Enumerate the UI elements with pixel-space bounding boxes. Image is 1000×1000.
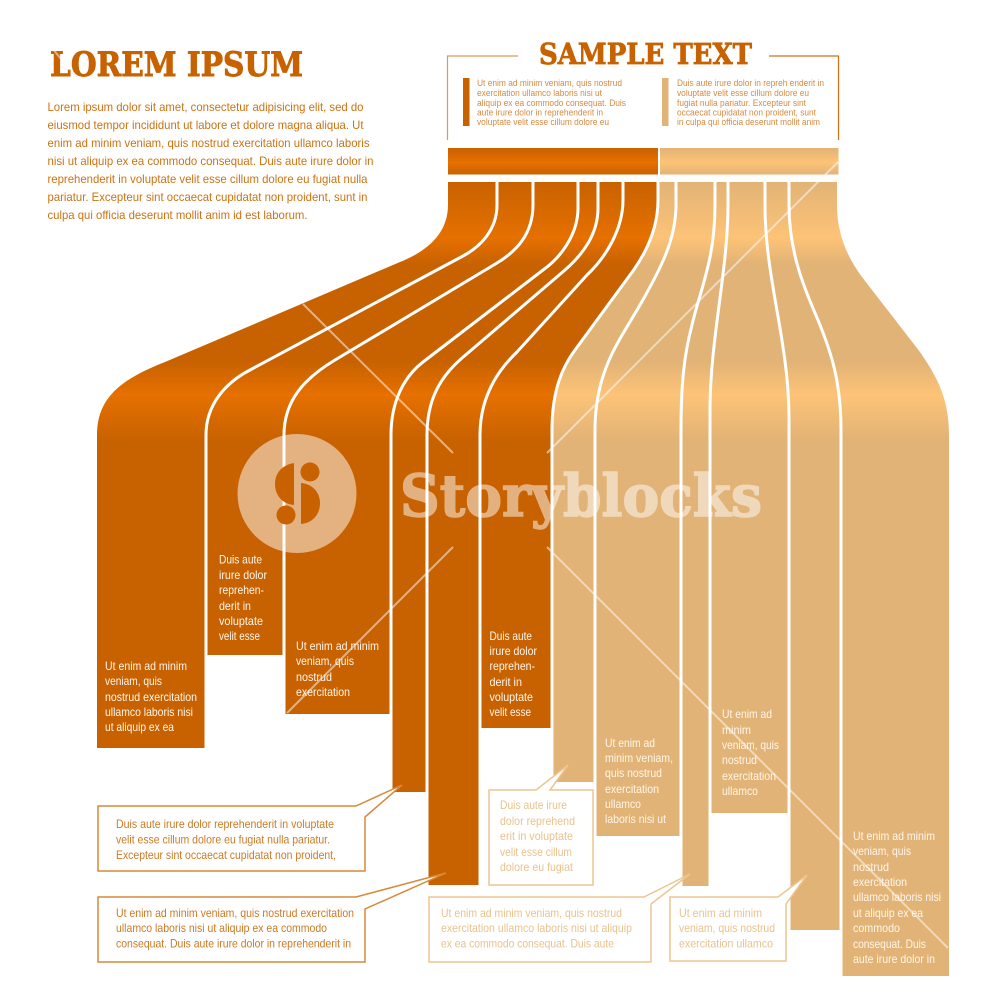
- ribbon label 2: derit in: [219, 600, 251, 613]
- watermark logo: [238, 434, 356, 553]
- intro paragraph: eiusmod tempor incididunt ut labore et dolore magna aliqua. Ut: [48, 118, 364, 132]
- ribbon label 6: voluptate: [490, 691, 533, 704]
- right column text: voluptate velit esse cillum dolore eu: [677, 88, 809, 98]
- left column marker: [463, 78, 470, 126]
- ribbon label 12: ullamco laboris nisi: [853, 891, 941, 904]
- intro paragraph: pariatur. Excepteur sint occaecat cupidatat non proident, sunt in: [48, 190, 368, 204]
- ribbon label 2: velit esse: [219, 630, 260, 643]
- ribbon label 1: veniam, quis: [105, 675, 162, 688]
- ribbon label 2: voluptate: [219, 615, 263, 628]
- ribbon label 12: ut aliquip ex ea: [853, 907, 923, 920]
- ribbon label 8: Ut enim ad: [605, 737, 655, 750]
- ribbon label 1: nostrud exercitation: [105, 691, 197, 704]
- ribbon label 6: derit in: [490, 676, 522, 689]
- ribbon label 12: commodo: [853, 922, 900, 935]
- intro paragraph: nisi ut aliquip ex ea commodo consequat. Duis aute irure dolor in: [48, 154, 374, 168]
- intro paragraph: Lorem ipsum dolor sit amet, consectetur adipisicing elit, sed do: [48, 100, 364, 114]
- ribbon label 10: Ut enim ad: [722, 708, 772, 721]
- left column text: aute irure dolor in reprehenderit in: [477, 108, 603, 118]
- ribbon label 6: Duis aute: [490, 630, 532, 643]
- header frame: [448, 56, 838, 140]
- ribbon label 12: consequat. Duis: [853, 938, 926, 951]
- callout: ribbon 7: dolore eu fugiat: [500, 861, 574, 874]
- ribbon label 12: Ut enim ad minim: [853, 830, 935, 843]
- right column text: Duis aute irure dolor in repreh enderit in: [677, 78, 824, 88]
- callout: ribbon 7: erit in voluptate: [500, 830, 573, 843]
- ribbon label 8: quis nostrud: [605, 767, 662, 780]
- ribbon label 6: velit esse: [490, 706, 531, 719]
- light segment: [660, 148, 838, 174]
- callout: ribbon 9: Ut enim ad minim veniam, quis nostrud: [441, 907, 622, 920]
- callout: ribbon 4: [98, 785, 402, 871]
- right column text: [677, 78, 824, 127]
- ribbon label 10: nostrud: [722, 754, 757, 767]
- left column text: aliquip ex ea commodo consequat. Duis: [477, 98, 626, 108]
- ribbon label 10: minim: [722, 724, 751, 737]
- ribbon label 3: exercitation: [296, 686, 350, 699]
- callout: ribbon 5: Ut enim ad minim veniam, quis nostrud exercitation: [116, 907, 354, 920]
- ribbon label 8: ullamco: [605, 798, 641, 811]
- ribbon label 1: ullamco laboris nisi: [105, 706, 193, 719]
- ribbon label 2: irure dolor: [219, 569, 267, 582]
- ribbon label 10: [722, 708, 779, 798]
- ribbon label 1: ut aliquip ex ea: [105, 721, 174, 734]
- ribbon label 3: nostrud: [296, 671, 332, 684]
- intro paragraph: culpa qui officia deserunt mollit anim id est laborum.: [48, 208, 308, 222]
- watermark wordmark: Storyblocks: [400, 462, 762, 531]
- flow chart: ribbons: [97, 180, 949, 978]
- ribbon label 8: laboris nisi ut: [605, 813, 667, 826]
- left column text: voluptate velit esse cillum dolore eu: [477, 117, 609, 127]
- callout: ribbon 11: veniam, quis nostrud: [679, 922, 775, 935]
- right column text: in culpa qui officia deserunt mollit anim: [677, 117, 820, 127]
- callout: ribbon 7: Duis aute irure: [500, 799, 567, 812]
- callout: ribbon 4: Excepteur sint occaecat cupidatat non proident,: [116, 849, 336, 862]
- callout: ribbon 9: ex ea commodo consequat. Duis aute: [441, 938, 614, 950]
- ribbon label 10: veniam, quis: [722, 739, 779, 752]
- light ribbons: [552, 182, 949, 976]
- ribbon separators: [206, 180, 841, 978]
- header title: SAMPLE TEXT: [539, 37, 752, 71]
- split bar: [448, 148, 838, 174]
- callout: ribbon 11: Ut enim ad minim: [679, 907, 762, 920]
- intro paragraph: [48, 100, 374, 222]
- ribbon label 6: [490, 630, 537, 719]
- ribbon label 1: [105, 660, 197, 734]
- left column text: [477, 78, 626, 127]
- ribbon label 2: Duis aute: [219, 554, 262, 566]
- intro paragraph: reprehenderit in voluptate velit esse cillum dolore eu fugiat nulla: [48, 172, 368, 186]
- callout: ribbon 9: [429, 874, 690, 962]
- ribbon label 12: nostrud: [853, 861, 889, 874]
- ribbon label 10: exercitation: [722, 770, 776, 783]
- dark ribbons: [97, 182, 658, 885]
- ribbon label 3: Ut enim ad minim: [296, 640, 379, 653]
- callout: ribbon 5: [98, 873, 446, 962]
- callout: ribbon 4: Duis aute irure dolor reprehenderit in voluptate: [116, 818, 334, 831]
- callout: ribbon 7: velit esse cillum: [500, 846, 572, 859]
- ribbon label 3: [296, 640, 379, 699]
- ribbon label 6: reprehen-: [490, 660, 535, 673]
- ribbon label 1: Ut enim ad minim: [105, 660, 187, 673]
- right column marker: [662, 78, 668, 126]
- callout: ribbon 11: [670, 875, 807, 961]
- ribbon label 6: irure dolor: [490, 645, 537, 658]
- intro paragraph: enim ad minim veniam, quis nostrud exercitation ullamco laboris: [48, 136, 370, 150]
- callout: ribbon 7: dolor reprehend: [500, 815, 575, 828]
- callout: ribbon 5: ullamco laboris nisi ut aliquip ex ea commodo: [116, 922, 327, 935]
- right column text: occaecat cupidatat non proident, sunt: [677, 108, 816, 118]
- callout: ribbon 11: exercitation ullamco: [679, 938, 773, 950]
- right column text: fugiat nulla pariatur. Excepteur sint: [677, 98, 806, 108]
- main title: LOREM IPSUM: [50, 45, 303, 85]
- ribbon label 12: exercitation: [853, 876, 907, 889]
- panel: sample text header: [448, 37, 838, 140]
- ribbon label 10: ullamco: [722, 785, 758, 798]
- ribbon label 8: minim veniam,: [605, 752, 673, 765]
- callout: ribbon 9: exercitation ullamco laboris nisi ut aliquip: [441, 922, 632, 935]
- ribbon label 12: aute irure dolor in: [853, 953, 935, 966]
- left column text: Ut enim ad minim veniam, quis nostrud: [477, 78, 622, 88]
- callout: ribbon 5: consequat. Duis aute irure dolor in reprehenderit in: [116, 938, 351, 950]
- ribbon label 12: [853, 830, 941, 966]
- ribbon label 3: veniam, quis: [296, 655, 354, 668]
- ribbon label 8: exercitation: [605, 783, 659, 796]
- ribbon label 2: [219, 554, 267, 643]
- callout: ribbon 7: [489, 765, 593, 885]
- ribbon label 2: reprehen-: [219, 584, 264, 597]
- dark segment: [448, 148, 658, 174]
- left column text: exercitation ullamco laboris nisi ut: [477, 88, 602, 98]
- ribbon label 8: [605, 737, 673, 826]
- callout: ribbon 4: velit esse cillum dolore eu fugiat nulla pariatur.: [116, 834, 330, 846]
- ribbon label 12: veniam, quis: [853, 845, 911, 858]
